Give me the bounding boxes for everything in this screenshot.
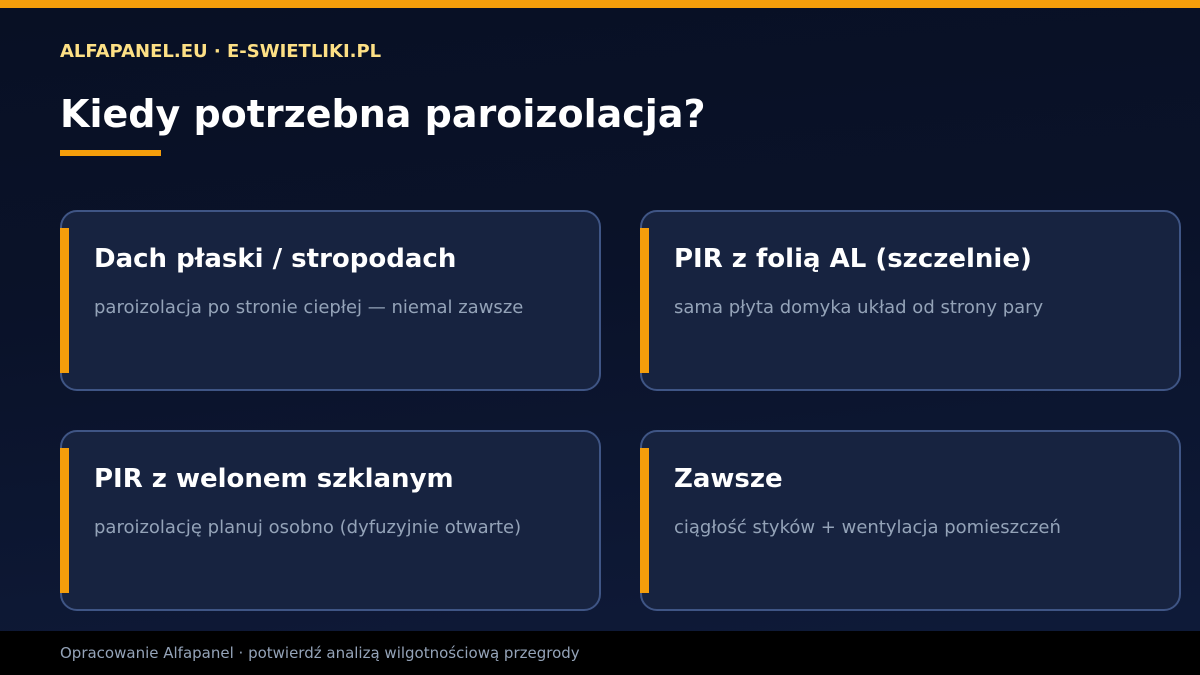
title underline: [60, 150, 161, 156]
title: Kiedy potrzebna paroizolacja?: [60, 92, 706, 136]
panel: PIR with AL foil: [640, 210, 1181, 391]
footer text: Opracowanie Alfapanel · potwierdź analizą wilgotnościową przegrody: [60, 644, 580, 662]
accent bar: [640, 448, 649, 593]
card text: paroizolację planuj osobno (dyfuzyjnie otwarte): [94, 517, 521, 538]
panel: PIR with glass veil: [60, 430, 601, 611]
brand line: ALFAPANEL.EU · E-SWIETLIKI.PL: [60, 41, 381, 62]
top accent stripe: [0, 0, 1200, 8]
card heading: Dach płaski / stropodach: [94, 244, 456, 274]
panel: flat roof: [60, 210, 601, 391]
card heading: PIR z folią AL (szczelnie): [674, 244, 1032, 274]
card text: ciągłość styków + wentylacja pomieszczeń: [674, 517, 1061, 538]
card text: sama płyta domyka układ od strony pary: [674, 297, 1043, 318]
card heading: PIR z welonem szklanym: [94, 464, 454, 494]
accent bar: [60, 448, 69, 593]
card heading: Zawsze: [674, 464, 783, 494]
panel: always: [640, 430, 1181, 611]
footer band: [0, 631, 1200, 675]
card text: paroizolacja po stronie ciepłej — niemal zawsze: [94, 297, 523, 318]
accent bar: [640, 228, 649, 373]
accent bar: [60, 228, 69, 373]
